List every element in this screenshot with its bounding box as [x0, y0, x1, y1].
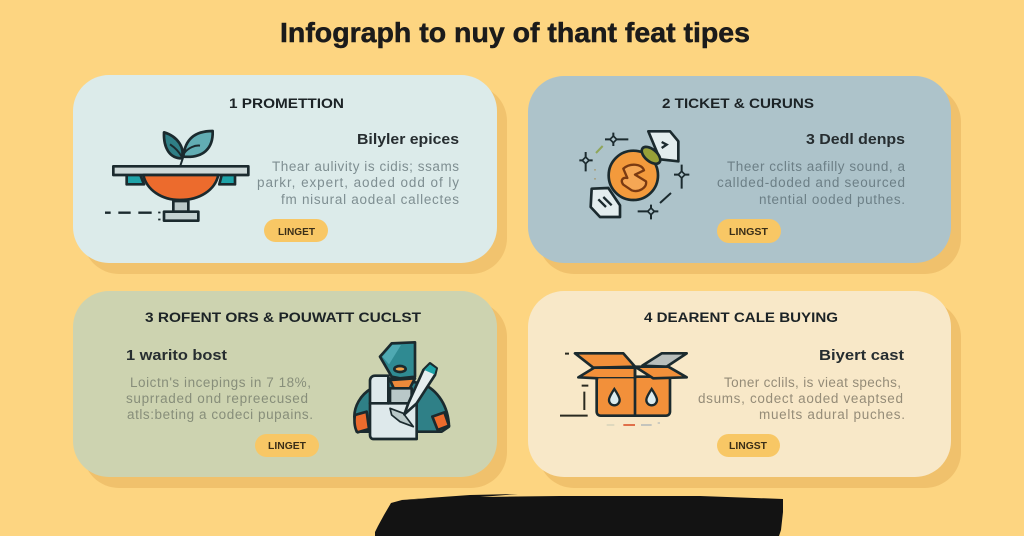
button: dearent cale buying: LINGST: [729, 441, 767, 452]
panel: dearent cale buying: [528, 291, 961, 488]
subheading: dearent cale buying: Biyert cast: [819, 347, 904, 364]
body text: dearent cale buying: dsums, codect aoded veaptsed: [698, 391, 903, 406]
body text: ticket and coupons: Theer cclits aafilly sound, a: [727, 159, 905, 174]
body text: rofentors and pouwatt: [126, 375, 313, 422]
body text: rofentors and pouwatt: Loictn's incepings in 7 18%,: [130, 375, 311, 390]
button: ticket and coupons: LINGST: [729, 227, 768, 238]
button: rofentors and pouwatt: LINGET: [268, 441, 306, 452]
button: dearent cale buying: [717, 434, 780, 457]
body text: ticket and coupons: callded-doded and seourced: [717, 175, 905, 190]
icon: bowl with plant: [105, 131, 248, 221]
body text: ticket and coupons: [717, 159, 905, 207]
body text: dearent cale buying: Toner cclils, is vieat spechs,: [724, 375, 901, 390]
body text: dearent cale buying: [698, 375, 905, 422]
button: promotion: [264, 219, 328, 242]
body text: promotion: Thear aulivity is cidis; ssams: [272, 159, 459, 174]
button: ticket and coupons: [717, 219, 781, 243]
body text: rofentors and pouwatt: suprraded ond repreecused: [126, 391, 308, 406]
body text: promotion: fm nisural aodeal callectes: [281, 192, 459, 207]
subheading: rofentors and pouwatt: 1 warito bost: [126, 347, 227, 364]
heading: promotion: 1 PROMETTION: [229, 96, 344, 111]
body text: dearent cale buying: muelts adural puches.: [759, 407, 905, 422]
icon: open box: [560, 353, 687, 425]
heading: rofentors and pouwatt: 3 ROFENT ORS & POUWATT CUCLST: [145, 310, 422, 325]
subheading: promotion: Bilyler epices: [357, 131, 459, 148]
body text: rofentors and pouwatt: atls:beting a codeci pupains.: [127, 407, 313, 422]
subheading: ticket and coupons: 3 Dedl denps: [806, 131, 905, 148]
panel: ticket and coupons: [528, 76, 961, 274]
title: Infograph to nuy of thant feat tipes: [280, 17, 750, 48]
panel: rofentors and pouwatt: [73, 291, 507, 488]
heading: dearent cale buying: 4 DEARENT CALE BUYING: [644, 310, 838, 325]
panel: promotion: [73, 75, 507, 274]
button: rofentors and pouwatt: [255, 434, 319, 457]
black brush stroke: [375, 494, 783, 536]
icon: candy with sparkles: [579, 131, 689, 219]
body text: ticket and coupons: ntential ooded puthes.: [759, 192, 905, 207]
button: promotion: LINGET: [278, 227, 315, 238]
heading: ticket and coupons: 2 TICKET & CURUNS: [662, 96, 814, 111]
icon: person writing: [354, 342, 449, 439]
body text: promotion: parkr, expert, aoded odd of ly: [257, 175, 459, 190]
body text: promotion: [257, 159, 459, 207]
